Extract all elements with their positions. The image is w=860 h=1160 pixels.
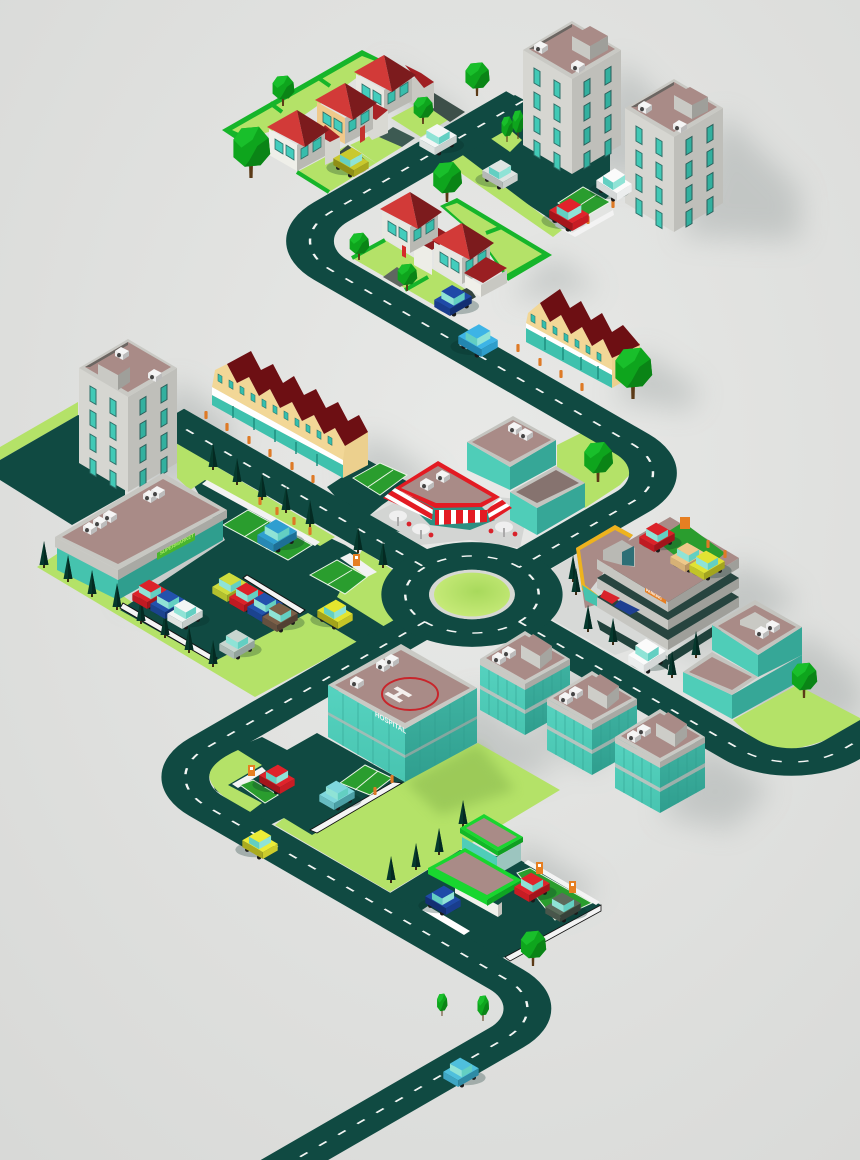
ground: lower-right lawn	[733, 685, 860, 750]
building: hospital	[328, 644, 477, 782]
tree: by restaurant lawn	[584, 442, 613, 482]
garage: stair housing	[603, 540, 635, 567]
ground: small lawn at roundabout	[337, 550, 395, 627]
parking: supermarket kerbs	[120, 575, 305, 662]
hospital sign: HOSPITAL	[375, 709, 407, 736]
tree: top centre	[465, 62, 490, 96]
tree: slim pair by tower	[502, 110, 524, 142]
car: red at gas	[514, 873, 557, 903]
office: behind restaurant	[467, 416, 585, 535]
ground: lawn strip beside road	[0, 402, 78, 460]
car: pale in lot	[219, 630, 262, 660]
awning right	[487, 498, 512, 522]
pumps: gas station	[536, 862, 576, 893]
shade on hospital lawn	[405, 743, 515, 815]
ground: restaurant side lawn	[557, 432, 632, 508]
tree: gas corner	[521, 931, 546, 966]
ground: hospital mini lawn	[210, 750, 262, 812]
tower: top left	[523, 21, 621, 174]
garage: middle deck	[597, 578, 668, 630]
ground: top lot strip	[445, 153, 562, 237]
van: white on road	[628, 638, 673, 674]
car: yellow by roundabout	[310, 600, 353, 630]
fuel pump by roundabout	[353, 554, 360, 566]
parking: hospital slots and kerb	[232, 765, 402, 833]
top-left housing plot	[222, 50, 465, 192]
car: navy at gas	[418, 886, 461, 916]
parking: gas station kerb and slots	[505, 860, 601, 961]
tree: terrace right	[615, 348, 652, 399]
car: sky blue on road	[450, 324, 498, 358]
tree: back garden	[273, 76, 294, 106]
terrace row: right	[516, 289, 640, 391]
car: white on road	[419, 124, 464, 156]
parking: restaurant slots	[353, 463, 407, 495]
car: yellow on road	[235, 830, 278, 860]
terrace row: left	[204, 351, 368, 483]
pines: hospital lawn	[386, 800, 468, 883]
garage: sign	[645, 587, 666, 604]
gas: kiosk	[460, 814, 523, 875]
cars: parked supermarket front	[132, 580, 210, 630]
car: yellow parked	[326, 148, 369, 178]
parking: top slots	[555, 187, 615, 237]
car: pale on top lot	[475, 160, 518, 190]
building: restaurant	[383, 461, 517, 539]
car: light blue hospital	[319, 781, 362, 811]
ground: lawn strip by supermarket lot	[177, 443, 335, 546]
restaurant roof	[395, 461, 500, 508]
house: second cluster left	[380, 192, 452, 275]
gas: canopy	[428, 848, 522, 905]
pines: supermarket front row	[40, 541, 218, 667]
tree: slim roadside right	[478, 995, 489, 1021]
ground: garage plaza	[553, 535, 700, 655]
building: gas station	[428, 814, 523, 917]
office: right two-stage	[683, 600, 802, 719]
soft building shadows	[118, 60, 860, 910]
pines: upper row	[208, 443, 314, 527]
car: red at top lot	[541, 198, 589, 232]
tree: top left large	[233, 127, 270, 178]
car: blue at bottom	[443, 1058, 486, 1088]
pines: garage	[568, 555, 700, 678]
garage: yellow stair tower	[576, 525, 633, 608]
tree: by house	[414, 97, 433, 124]
office: mid three	[615, 709, 705, 813]
cars: parked supermarket rear	[212, 573, 305, 633]
tree: second plot front	[398, 264, 417, 291]
bollards: hospital	[373, 775, 394, 795]
helipad: H	[380, 684, 418, 706]
car: blue van	[257, 519, 305, 553]
umbrellas	[389, 510, 517, 539]
car: dark at gas	[545, 893, 588, 923]
second housing plot	[352, 198, 552, 313]
van: white at top lot	[589, 168, 632, 202]
ground: supermarket lawn	[37, 552, 357, 697]
car: navy	[434, 285, 479, 317]
house: back	[354, 55, 434, 116]
tree: slim roadside left	[437, 994, 447, 1016]
garage: sign: PARKING	[646, 587, 662, 601]
gas: pump block	[455, 882, 498, 917]
parking: roundabout slots	[310, 553, 377, 594]
tower: top right	[625, 79, 723, 232]
dark parking lots	[0, 95, 610, 965]
garage: bottom deck	[597, 620, 668, 670]
house: front	[267, 110, 340, 171]
helipad	[380, 678, 438, 710]
garage: top deck	[597, 559, 668, 612]
building: supermarket	[55, 473, 227, 600]
tree: right office	[792, 663, 817, 698]
fuel pump: hospital	[248, 765, 255, 776]
ground: small lawn by tower	[490, 128, 522, 152]
cars: garage roof	[639, 523, 732, 581]
ground: hospital lawn	[275, 743, 560, 892]
awning centre	[435, 510, 487, 525]
car: red hospital	[252, 765, 295, 795]
lane marking at gas station	[422, 906, 470, 935]
tree: above second plot	[433, 162, 462, 202]
office: mid two	[547, 671, 637, 775]
house: middle	[315, 83, 388, 144]
office: mid one	[480, 631, 570, 735]
tree: second plot left	[350, 233, 369, 260]
ground: restaurant plaza	[370, 490, 530, 548]
tower: left	[79, 339, 177, 492]
supermarket sign: SUPERMARKET	[160, 532, 194, 557]
pines: small lawn	[354, 526, 388, 568]
house: second cluster right	[432, 223, 507, 297]
awning left	[383, 488, 433, 520]
building: parking garage	[576, 517, 739, 670]
parking: supermarket upper slots	[202, 480, 320, 560]
